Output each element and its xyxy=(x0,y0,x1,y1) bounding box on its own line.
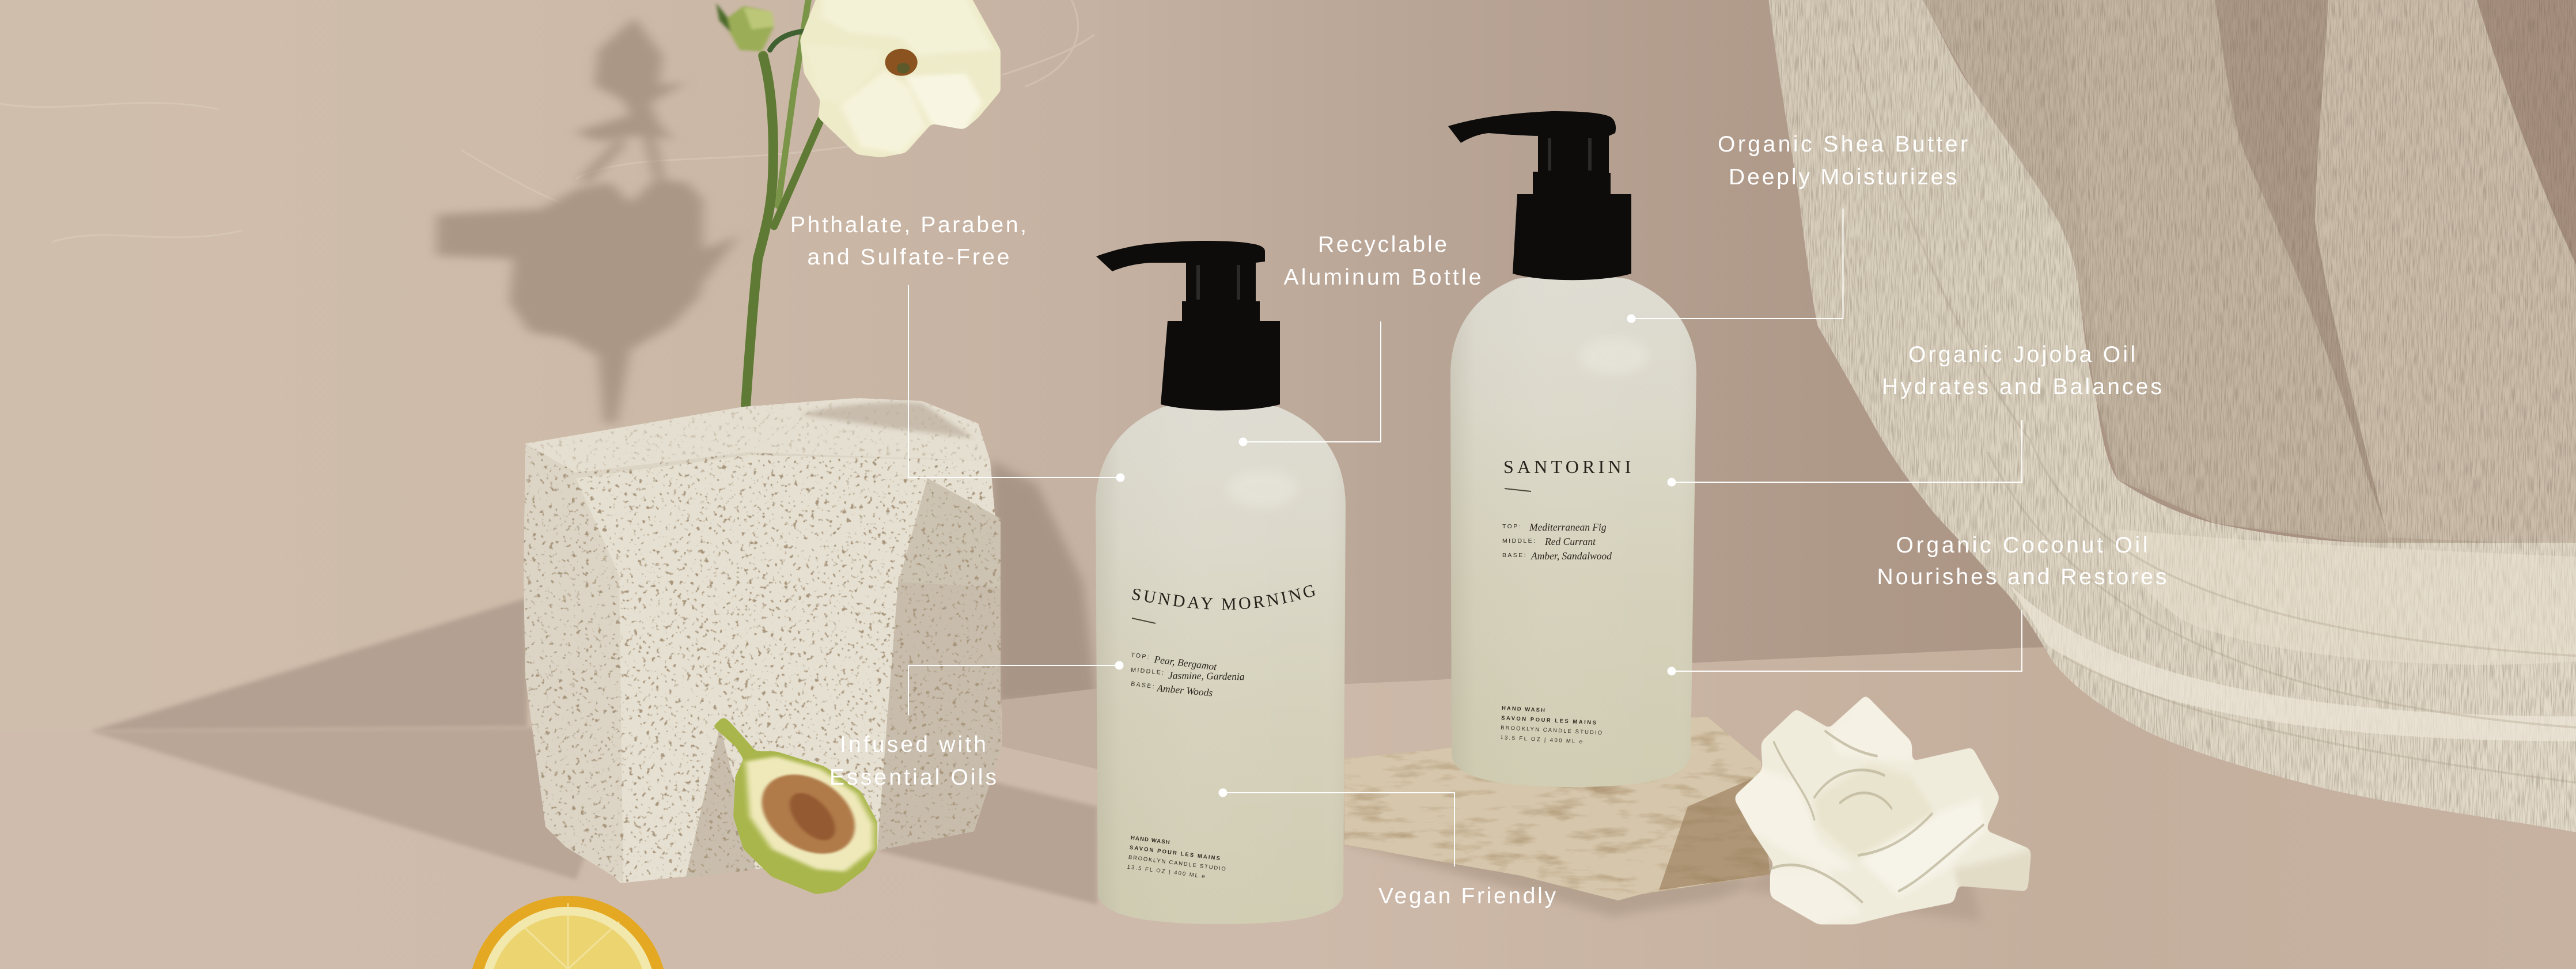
callout: organic coconut oil: Organic Coconut Oil xyxy=(1896,533,2147,558)
callout: vegan friendly: Vegan Friendly xyxy=(1378,884,1556,909)
label: SAVON POUR LES MAINS xyxy=(1501,715,1596,726)
label: Amber, Sandalwood xyxy=(1531,550,1612,562)
label: 13.5 FL OZ | 400 ML ℮ xyxy=(1127,864,1206,880)
callout: organic jojoba oil: Hydrates and Balances xyxy=(1882,374,2162,399)
wall background xyxy=(0,0,2576,749)
callout: recyclable aluminum bottle: Aluminum Bottle xyxy=(1283,265,1482,290)
label: HAND WASH xyxy=(1502,705,1545,714)
pumice block xyxy=(524,398,1001,883)
label: BASE: xyxy=(1502,552,1527,559)
front drape xyxy=(1768,0,2576,832)
label: Mediterranean Fig xyxy=(1529,521,1607,533)
fig xyxy=(713,717,877,894)
label: MIDDLE: xyxy=(1502,538,1536,544)
callout: organic shea butter: Deeply Moisturizes xyxy=(1729,165,1957,190)
label: Jasmine, Gardenia xyxy=(1168,669,1245,682)
back fabric xyxy=(1923,0,2576,546)
callout: phthalate, paraben, and sulfate-free: Phthalate, Paraben, xyxy=(790,213,1026,237)
label: Pear, Bergamot xyxy=(1153,653,1218,672)
callout: recyclable aluminum bottle xyxy=(1238,232,1482,446)
stems xyxy=(746,0,824,406)
callout: organic jojoba oil: Organic Jojoba Oil xyxy=(1908,342,2135,367)
label xyxy=(1500,456,1635,746)
callout: organic coconut oil: Nourishes and Restores xyxy=(1877,565,2167,589)
label: BROOKLYN CANDLE STUDIO xyxy=(1501,725,1602,736)
lemon xyxy=(472,896,664,969)
callout: organic shea butter: Organic Shea Butter xyxy=(1718,132,1968,157)
slab of stone xyxy=(1344,717,1770,900)
label: HAND WASH xyxy=(1130,835,1170,846)
label: TOP: xyxy=(1131,652,1151,661)
pump xyxy=(1096,241,1280,410)
bud xyxy=(716,3,774,51)
label: BASE: xyxy=(1131,680,1156,690)
callout: organic shea butter xyxy=(1627,132,1968,323)
callout: infused with essential oils: Infused with xyxy=(840,732,986,757)
bottle body xyxy=(1096,403,1346,924)
label: SUNDAY MORNING xyxy=(1132,585,1315,610)
callout: infused with essential oils: Essential Oils xyxy=(829,765,997,790)
label: MIDDLE: xyxy=(1131,667,1165,676)
callout: infused with essential oils xyxy=(829,661,1123,790)
label xyxy=(1127,585,1315,880)
label: Red Currant xyxy=(1544,536,1596,547)
callout: vegan friendly xyxy=(1219,788,1556,909)
linen curtain xyxy=(1768,0,2576,832)
flower shadow on wall xyxy=(437,18,740,423)
callouts xyxy=(790,132,2167,909)
floor xyxy=(0,628,2576,969)
bottle: Sunday Morning xyxy=(1096,241,1346,924)
callout: phthalate, paraben, and sulfate-free: and Sulfate-Free xyxy=(808,245,1009,270)
bottle: Santorini xyxy=(1448,111,1696,787)
flower centre xyxy=(885,49,918,76)
gardenia flower xyxy=(1733,695,2031,924)
label: Amber Woods xyxy=(1156,682,1213,698)
pump xyxy=(1448,111,1631,280)
label: BROOKLYN CANDLE STUDIO xyxy=(1128,854,1226,872)
label: SAVON POUR LES MAINS xyxy=(1129,845,1220,862)
blossom xyxy=(800,0,1001,157)
bottle body xyxy=(1450,275,1696,787)
callout: recyclable aluminum bottle: Recyclable xyxy=(1318,232,1447,257)
callout: organic jojoba oil xyxy=(1667,342,2162,486)
label: SANTORINI xyxy=(1503,456,1635,477)
callout: phthalate, paraben, and sulfate-free xyxy=(790,213,1124,482)
label: 13.5 FL OZ | 400 ML ℮ xyxy=(1500,735,1583,745)
callout: organic coconut oil xyxy=(1667,533,2167,675)
flower: ranunculus with stems xyxy=(716,0,1001,406)
label: TOP: xyxy=(1502,523,1522,530)
cast shadows on wall and floor xyxy=(90,461,1982,922)
